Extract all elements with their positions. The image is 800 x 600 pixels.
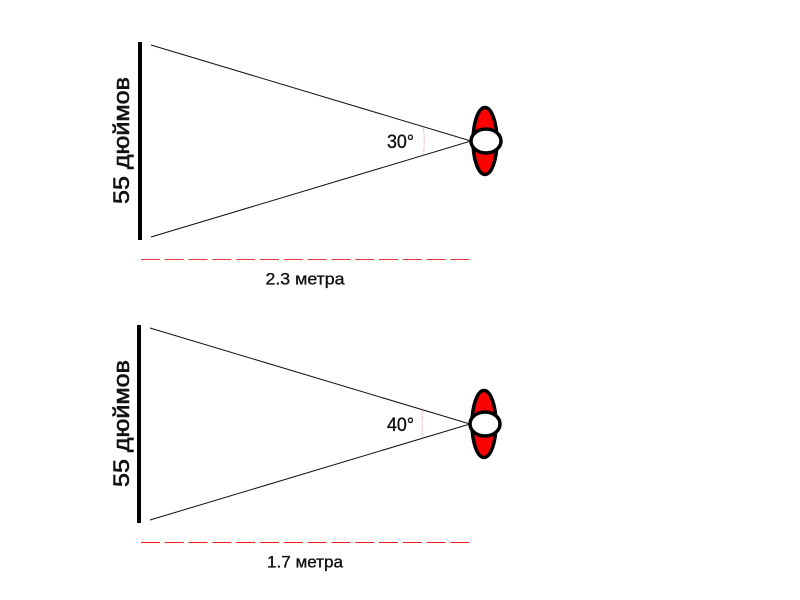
viewing angle lines <box>150 328 470 520</box>
distance dashed line <box>141 258 470 260</box>
label: screen size: 55 дюймов <box>109 360 134 487</box>
panel: 30 degree viewing angle <box>109 42 501 288</box>
label: angle: 40° <box>387 415 414 436</box>
viewing angle lines <box>151 45 471 237</box>
icon: viewer head <box>470 390 500 458</box>
panel: 40 degree viewing angle <box>109 325 500 572</box>
icon: viewer head <box>471 108 501 174</box>
icon: TV screen bar <box>138 42 142 240</box>
label: angle: 30° <box>387 132 414 153</box>
angle arc <box>422 128 425 154</box>
distance dashed line <box>141 542 470 544</box>
label: distance: 1.7 метра <box>267 552 344 572</box>
angle arc <box>422 411 423 437</box>
icon: TV screen bar <box>137 325 141 523</box>
label: distance: 2.3 метра <box>266 270 345 288</box>
label: screen size: 55 дюймов <box>109 77 134 204</box>
